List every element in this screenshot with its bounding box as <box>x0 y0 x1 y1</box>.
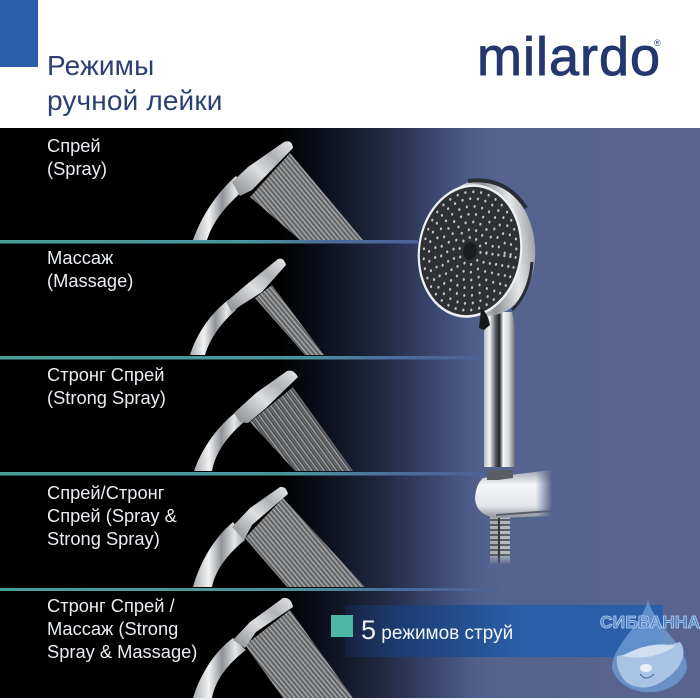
label: massage: Массаж <box>47 247 113 268</box>
handle <box>484 312 515 480</box>
watermark: bath in water drop <box>612 600 687 692</box>
label: strong spray <box>47 364 166 408</box>
label: spray <box>47 135 107 179</box>
title: Режимы <box>47 50 154 81</box>
label: spray and strong spray: Спрей/Стронг <box>47 482 164 503</box>
divider lines <box>0 240 500 591</box>
illustration: shower heads and jets <box>0 141 551 698</box>
label: spray and strong spray <box>47 482 177 549</box>
label: strong spray and massage: Массаж (Strong <box>47 618 178 639</box>
logo: milardo: ® <box>654 38 661 48</box>
face rim <box>409 177 531 325</box>
label: spray and strong spray: Strong Spray) <box>47 528 160 549</box>
title: ручной лейки <box>47 85 223 116</box>
logo: milardo: milardo <box>477 27 661 87</box>
chrome back <box>426 175 542 321</box>
shower head 2: massage <box>190 259 324 355</box>
label: spray: (Spray) <box>47 158 107 179</box>
wall clamp <box>475 470 552 518</box>
label: strong spray and massage: Стронг Спрей / <box>47 595 175 616</box>
label: massage: (Massage) <box>47 270 133 291</box>
callout: 5 jet modes <box>345 605 663 657</box>
teal marker square <box>331 615 353 637</box>
shower head 4: spray and strong spray <box>193 487 365 587</box>
shower head 5: strong spray and massage <box>193 598 353 698</box>
shower head 3: strong spray <box>194 371 353 471</box>
main shower head <box>409 175 542 330</box>
bottom edge strip <box>0 698 700 700</box>
black selector lever <box>479 309 490 330</box>
nozzle face <box>412 180 528 322</box>
label: spray: Спрей <box>47 135 101 156</box>
watermark label: СИБВАННА <box>600 612 700 632</box>
shower head 1: spray <box>193 141 363 240</box>
title <box>47 50 223 116</box>
callout text: 5 режимов струй <box>361 615 513 645</box>
label: massage <box>47 247 133 291</box>
label: strong spray and massage <box>47 595 197 662</box>
label: strong spray: (Strong Spray) <box>47 387 166 408</box>
hose <box>490 516 510 564</box>
label: strong spray: Стронг Спрей <box>47 364 164 385</box>
label: spray and strong spray: Спрей (Spray & <box>47 505 177 526</box>
label: strong spray and massage: Spray & Massage) <box>47 641 197 662</box>
corner accent block <box>0 0 38 67</box>
